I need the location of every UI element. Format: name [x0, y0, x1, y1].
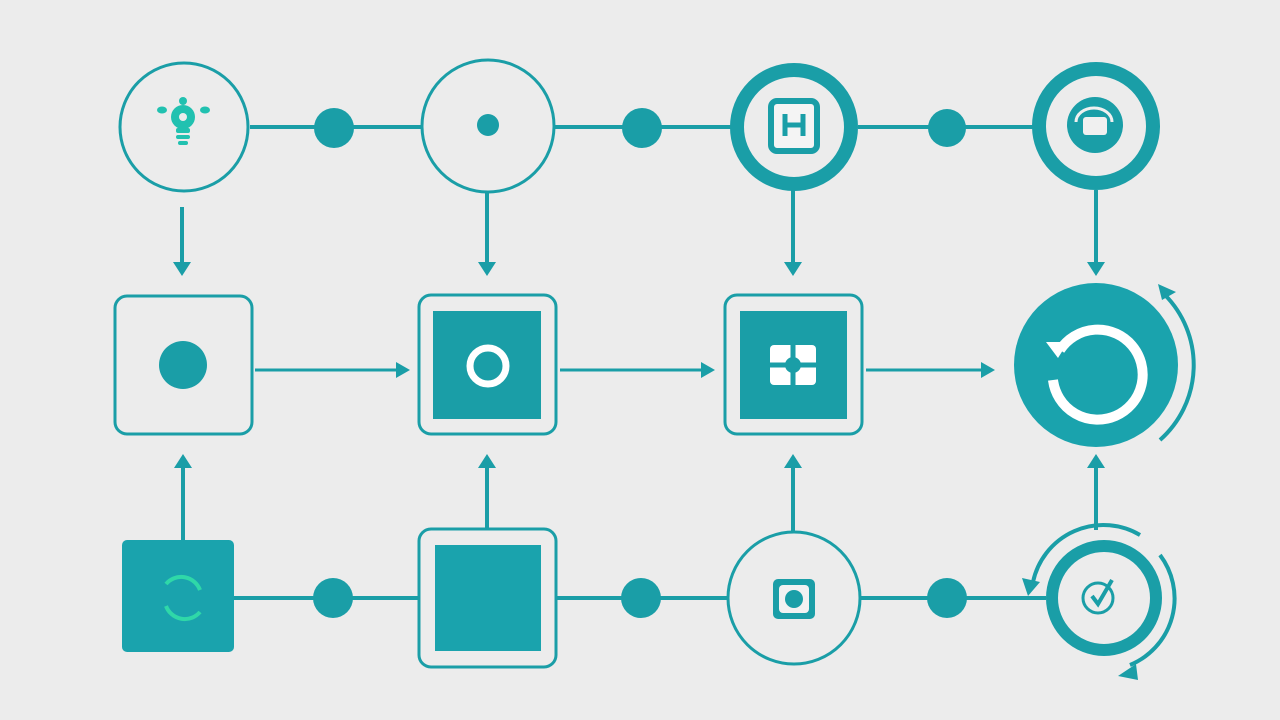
arrows right	[255, 362, 995, 378]
node: filled square with cycle icon	[122, 540, 234, 652]
node: thick ring with robot icon	[1039, 69, 1153, 183]
node: big refresh circle	[1014, 283, 1194, 447]
connector dot 1	[314, 108, 354, 148]
connector dot 3	[928, 109, 966, 147]
node: circle with square icon	[728, 532, 860, 664]
connector dot 2	[622, 108, 662, 148]
arrows up	[174, 454, 1105, 540]
row 3 connectors	[234, 596, 1046, 600]
node: box with dot	[115, 296, 252, 434]
node: lightbulb circle	[120, 63, 248, 191]
icon: lightbulb	[157, 97, 210, 145]
node: box with cross icon	[725, 295, 862, 434]
connector dot 6	[927, 578, 967, 618]
node: box with filled square	[419, 529, 556, 667]
node: check ring with cycle arrows	[1022, 525, 1175, 680]
row 1 connectors	[250, 125, 1033, 129]
connector dot 5	[621, 578, 661, 618]
node: dot circle	[422, 60, 554, 192]
node: box with ring	[419, 295, 556, 434]
connector dot 4	[313, 578, 353, 618]
node: thick ring with square icon	[737, 70, 851, 184]
arrows down	[173, 190, 1105, 276]
